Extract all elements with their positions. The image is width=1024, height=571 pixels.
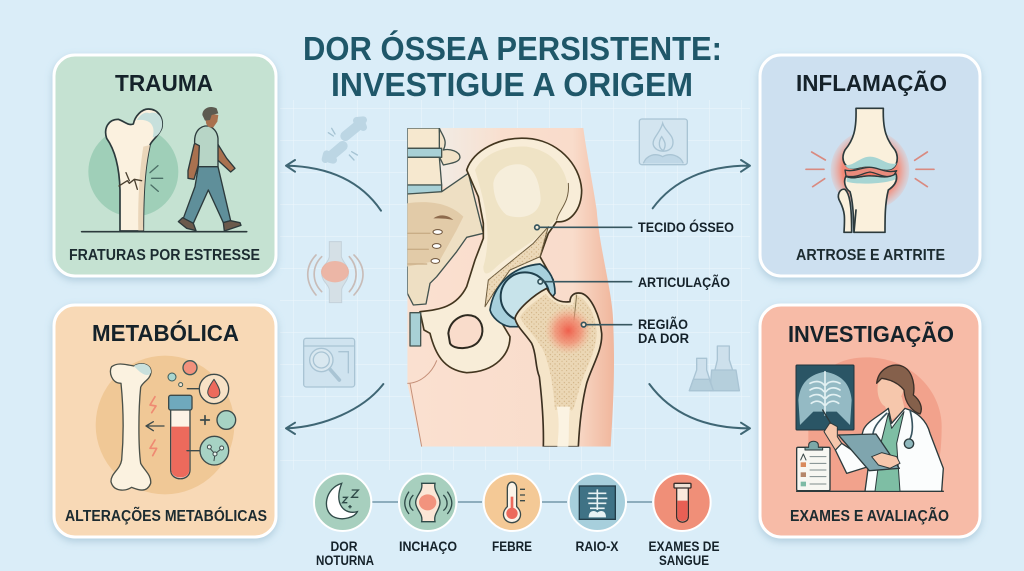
icon: raio-x (569, 474, 626, 531)
cancellous ilium (485, 227, 548, 307)
body silhouette (407, 128, 614, 447)
central hip anatomy illustration (407, 128, 632, 447)
icon: dor noturna (314, 474, 371, 531)
title: DOR ÓSSEA PERSISTENTE: (303, 30, 722, 67)
symptom labels: DOR (330, 539, 358, 554)
symptom labels: EXAMES DE (648, 539, 720, 554)
icon: search window (faint) (304, 338, 355, 387)
spine vertebrae and discs (407, 128, 460, 194)
panel: investigacao (760, 305, 980, 537)
panel: trauma (54, 55, 276, 276)
pain region (547, 309, 590, 352)
illustration: bone, blood tube and markers (96, 356, 236, 494)
pelvis bone (420, 138, 582, 373)
callout labels: REGIÃO (638, 317, 688, 332)
symptom labels: RAIO-X (576, 539, 618, 554)
obturator foramen (448, 315, 482, 348)
sacrum (407, 173, 483, 305)
illustration: doctor with x-ray (796, 357, 943, 492)
arrows (286, 160, 383, 434)
title: INVESTIGUE A ORIGEM (331, 66, 693, 103)
hip joint (490, 264, 555, 327)
caption: fraturas por estresse: FRATURAS POR ESTRESSE (69, 247, 260, 264)
callout leader lines (535, 225, 632, 327)
icon: exames de sangue (653, 474, 711, 531)
caption: artrose e artrite: ARTROSE E ARTRITE (796, 247, 945, 264)
heading: trauma: TRAUMA (115, 70, 213, 96)
symptom labels: SANGUE (659, 553, 709, 568)
callout labels: DA DOR (638, 331, 689, 346)
symptom strip (314, 474, 720, 568)
icon: broken bone (faint) (325, 120, 363, 160)
symptom labels (316, 539, 720, 568)
arrows right (649, 160, 750, 434)
symptom labels: NOTURNA (316, 553, 374, 568)
caption: exames e avaliacao: EXAMES E AVALIAÇÃO (790, 507, 949, 525)
symptom labels: FEBRE (492, 539, 532, 554)
femur (515, 288, 602, 447)
callout labels: TECIDO ÓSSEO (638, 220, 734, 235)
icon: febre (484, 474, 541, 531)
heading: metabolica: METABÓLICA (92, 319, 239, 346)
icon: flasks (faint) (689, 346, 739, 391)
illustration: fractured femur and walking person (82, 107, 247, 232)
pubic symphysis (410, 313, 421, 346)
lower body crease (407, 361, 437, 447)
icon: inchaco (399, 474, 456, 531)
callout labels: ARTICULAÇÃO (638, 275, 730, 290)
icon: painful joint (faint) (308, 242, 363, 303)
caption: alteracoes metabolicas: ALTERAÇÕES METABÓLICAS (65, 507, 267, 525)
icon: flame box (faint) (639, 119, 687, 165)
title (303, 30, 722, 103)
symptom labels: INCHAÇO (399, 539, 457, 554)
heading: inflamacao: INFLAMAÇÃO (796, 69, 947, 96)
panel: inflamacao (760, 55, 980, 276)
illustration: inflamed knee (806, 108, 934, 232)
callout labels (638, 220, 734, 346)
heading: investigacao: INVESTIGAÇÃO (788, 320, 954, 347)
panel: metabolica (54, 305, 276, 537)
connector lines (372, 501, 652, 503)
